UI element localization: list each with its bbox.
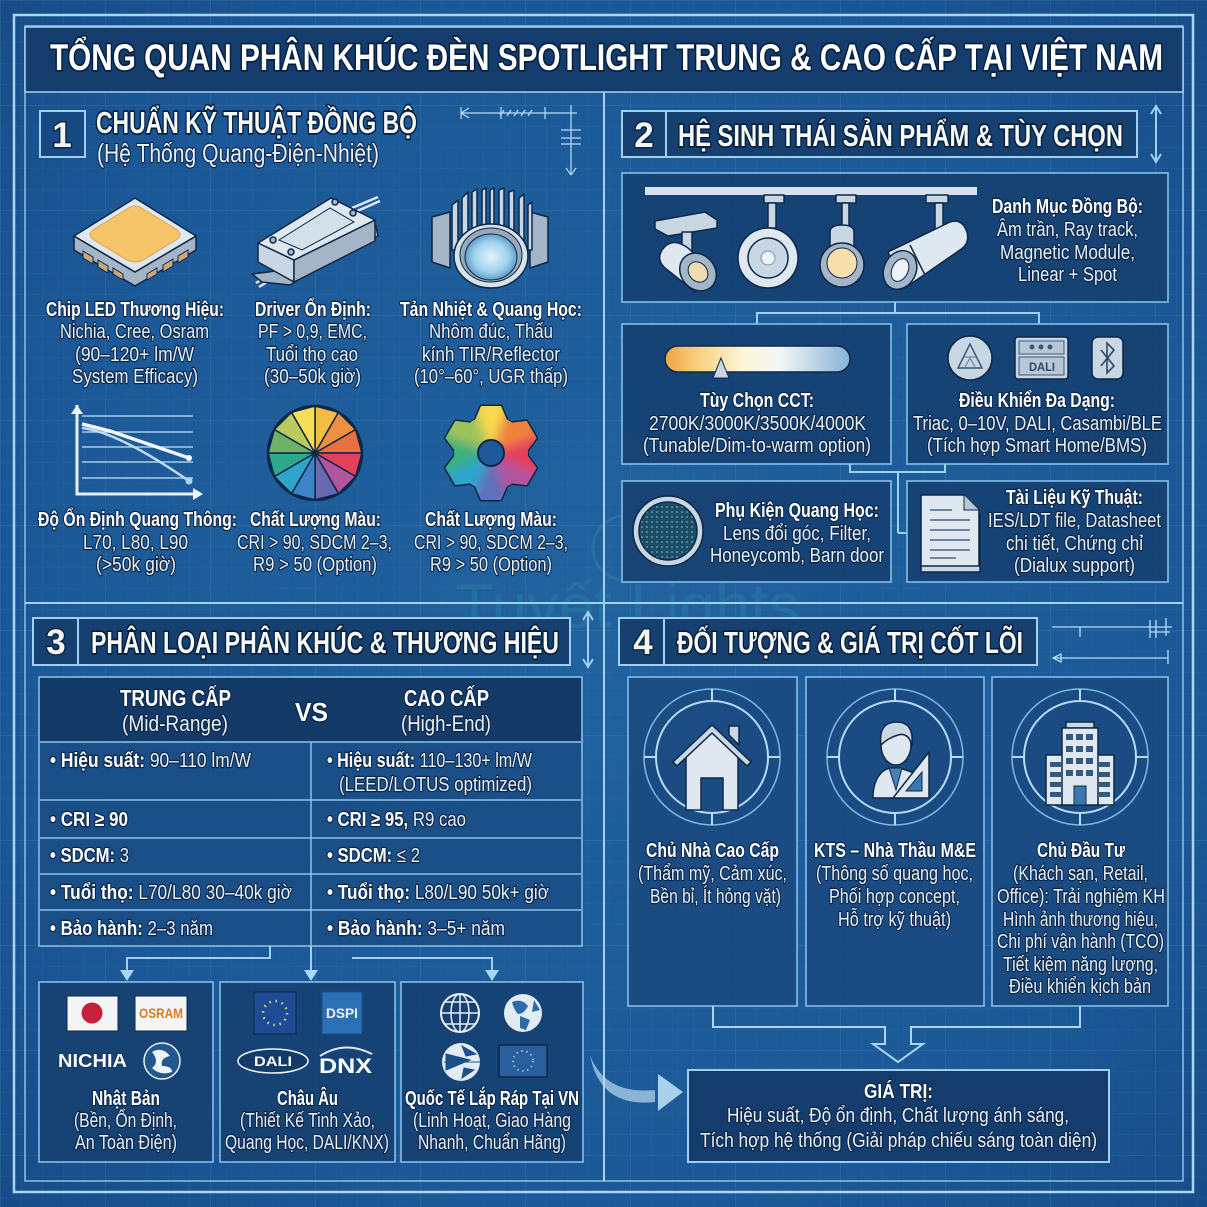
table header: (Mid-Range) xyxy=(122,711,228,736)
section 4 heading: 4 xyxy=(633,623,653,662)
caption: investors: (Khách sạn, Retail, xyxy=(1013,863,1148,885)
caption: CCT: 2700K/3000K/3500K/4000K xyxy=(649,413,867,435)
caption: homeowners: Chủ Nhà Cao Cấp xyxy=(646,840,779,862)
caption: LED chip: Nichia, Cree, Osram xyxy=(60,321,209,343)
icons: Europe logos: DNX xyxy=(319,1055,372,1078)
caption: Europe xyxy=(225,1086,389,1154)
mid-range column: • Tuổi thọ: L70/L80 30–40k giờ xyxy=(50,882,292,904)
mid-range column: • Bảo hành: 2–3 năm xyxy=(50,918,213,940)
section 2 heading: 2 xyxy=(634,116,654,155)
table header: (High-End) xyxy=(401,711,491,736)
connector: range branches xyxy=(757,302,1039,324)
caption: LED chip: Chip LED Thương Hiệu: xyxy=(46,299,224,321)
caption: accessories: Phụ Kiện Quang Học: xyxy=(715,500,879,522)
caption: Europe: (Thiết Kế Tinh Xảo, xyxy=(240,1110,375,1132)
caption: controls xyxy=(913,390,1162,457)
caption: product range: Âm trần, Ray track, xyxy=(997,218,1138,241)
section 1 heading xyxy=(40,104,417,168)
comparison table xyxy=(39,677,582,946)
caption: driver: Driver Ổn Định: xyxy=(255,297,371,321)
caption: accessories: Honeycomb, Barn door xyxy=(710,545,884,567)
caption: driver: (30–50k giờ) xyxy=(264,366,361,388)
panel: section 3 segments and brands xyxy=(33,612,593,1162)
icons: global logos xyxy=(441,994,547,1081)
table header: TRUNG CẤP xyxy=(120,684,231,711)
caption: heat and optics: kính TIR/Reflector xyxy=(422,344,560,366)
high-end column: (LEED/LOTUS optimized) xyxy=(339,774,532,796)
high-end column: • Bảo hành: 3–5+ năm xyxy=(327,918,505,940)
caption: documentation: chi tiết, Chứng chỉ xyxy=(1006,533,1143,555)
arrows: table to brand groups xyxy=(120,946,499,981)
panel: section 2 product ecosystem xyxy=(622,106,1168,582)
table header: CAO CẤP xyxy=(404,684,489,711)
caption: Japan: (Bền, Ổn Định, xyxy=(74,1108,177,1132)
caption: investors: Chi phí vận hành (TCO) xyxy=(997,931,1164,953)
caption: colour quality 1: Chất Lượng Màu: xyxy=(250,509,381,531)
high-end column xyxy=(327,750,549,940)
section 1 heading: CHUẨN KỸ THUẬT ĐỒNG BỘ xyxy=(96,104,417,140)
chart: lumen maintenance xyxy=(71,405,203,500)
caption: colour quality 1: R9 > 50 (Option) xyxy=(253,554,377,576)
panel: core value: GIÁ TRỊ: xyxy=(864,1080,933,1103)
caption: Europe: Châu Âu xyxy=(277,1086,338,1110)
caption: homeowners: Bền bỉ, Ít hỏng vặt) xyxy=(650,885,781,908)
caption: architects: Hỗ trợ kỹ thuật) xyxy=(838,908,951,931)
icon: architect xyxy=(827,689,963,825)
mid-range column: • SDCM: 3 xyxy=(50,845,129,867)
panel: section 4 audience and value xyxy=(590,618,1172,1162)
caption: investors: Office): Trải nghiệm KH xyxy=(997,886,1165,908)
caption: colour quality 2: CRI > 90, SDCM 2–3, xyxy=(414,532,568,554)
high-end column: • Hiệu suất: 110–130+ lm/W xyxy=(327,750,532,772)
icons: Europe logos: DSPI xyxy=(326,1005,358,1021)
caption: LED chip: System Efficacy) xyxy=(72,366,198,388)
caption: product range: Magnetic Module, xyxy=(1000,242,1135,264)
caption: heat and optics: (10°–60°, UGR thấp) xyxy=(414,366,568,388)
caption: investors: Chủ Đầu Tư xyxy=(1037,840,1125,862)
caption: accessories xyxy=(710,500,884,567)
panel: documentation xyxy=(907,481,1168,582)
mid-range column: • Hiệu suất: 90–110 lm/W xyxy=(50,750,251,772)
caption: colour quality 1 xyxy=(237,509,392,576)
caption: colour quality 2: Chất Lượng Màu: xyxy=(425,509,557,531)
connector: options to accessories xyxy=(850,464,945,533)
panel: product range xyxy=(622,173,1168,302)
arrow: cards to value xyxy=(713,1006,1080,1062)
caption: colour quality 2 xyxy=(414,509,568,576)
high-end column: • Tuổi thọ: L80/L90 50k+ giờ xyxy=(327,882,549,904)
section 4 heading xyxy=(619,618,1037,665)
section 4 heading: ĐỐI TƯỢNG & GIÁ TRỊ CỐT LÕI xyxy=(677,624,1023,660)
caption: driver: PF > 0,9, EMC, xyxy=(258,321,367,343)
section 1 heading: 1 xyxy=(52,116,72,155)
card: homeowners xyxy=(628,677,797,1006)
icon: document xyxy=(921,495,980,572)
caption: controls: Điều Khiển Đa Dạng: xyxy=(959,390,1115,412)
caption: CCT: Tùy Chọn CCT: xyxy=(700,390,814,412)
panel: controls xyxy=(907,324,1168,464)
high-end column: • SDCM: ≤ 2 xyxy=(327,845,420,867)
caption: controls: (Tích hợp Smart Home/BMS) xyxy=(927,435,1147,457)
caption: LED chip: (90–120+ lm/W xyxy=(75,344,194,366)
caption: international: Nhanh, Chuẩn Hãng) xyxy=(418,1132,566,1154)
caption: investors: Hình ảnh thương hiệu, xyxy=(1003,909,1158,931)
caption: LED chip xyxy=(46,299,224,388)
caption: homeowners xyxy=(638,840,787,908)
mid-range column xyxy=(50,750,292,940)
panel: Europe brands xyxy=(220,982,395,1162)
table header: VS xyxy=(295,697,328,727)
caption: heat and optics: Nhôm đúc, Thấu xyxy=(429,321,553,343)
caption: Japan xyxy=(74,1088,177,1154)
icons: control protocols xyxy=(948,336,1123,380)
icon: colour gear xyxy=(444,404,538,502)
caption: documentation: Tài Liệu Kỹ Thuật: xyxy=(1006,487,1143,509)
caption: documentation xyxy=(988,487,1161,577)
icons: control protocols: DALI xyxy=(1029,360,1055,374)
icons: Japan logos: NICHIA xyxy=(58,1051,127,1071)
caption: controls: Triac, 0–10V, DALI, Casambi/BLE xyxy=(913,413,1162,435)
panel: core value xyxy=(688,1070,1109,1162)
caption: colour quality 2: R9 > 50 (Option) xyxy=(430,554,552,576)
icon: track lights xyxy=(645,187,977,298)
icon: LED chip xyxy=(74,198,196,286)
caption: investors xyxy=(997,840,1165,998)
caption: CCT: (Tunable/Dim-to-warm option) xyxy=(643,435,871,457)
watermark: Tuyết Lights xyxy=(455,572,800,641)
icon: office building xyxy=(1012,689,1148,825)
panel: Japan brands xyxy=(39,982,213,1162)
panel: section 1 technical standards xyxy=(38,104,582,576)
section 3 heading: 3 xyxy=(46,623,66,662)
caption: Japan: Nhật Bản xyxy=(92,1088,160,1110)
panel: core value: Hiệu suất, Độ ổn định, Chất lượng ánh sáng, xyxy=(727,1105,1069,1127)
panel: optical accessories xyxy=(622,481,891,582)
icons: Europe logos: DALI xyxy=(254,1053,292,1069)
section 1 heading: (Hệ Thống Quang-Điện-Nhiệt) xyxy=(97,138,379,168)
icons: Japan logos: OSRAM xyxy=(139,1005,183,1021)
icon: house xyxy=(644,689,780,825)
icons: Europe logos xyxy=(238,992,372,1078)
caption: international: (Linh Hoạt, Giao Hàng xyxy=(413,1110,571,1132)
caption: lumen stability xyxy=(38,507,237,576)
caption: heat and optics xyxy=(400,299,582,388)
caption: lumen stability: (>50k giờ) xyxy=(96,554,176,576)
title bar xyxy=(25,27,1183,92)
icon: colour wheel xyxy=(268,406,362,500)
caption: international xyxy=(405,1086,579,1154)
table header xyxy=(120,684,491,736)
caption: documentation: IES/LDT file, Datasheet xyxy=(988,510,1161,532)
caption: CCT xyxy=(643,390,871,457)
caption: homeowners: (Thẩm mỹ, Cảm xúc, xyxy=(638,863,787,885)
blueprint dimension marks xyxy=(461,105,581,175)
caption: Europe: Quang Học, DALI/KNX) xyxy=(225,1132,389,1154)
icon: honeycomb lens xyxy=(633,496,703,566)
watermark xyxy=(455,516,800,641)
panel: core value: Tích hợp hệ thống (Giải pháp chiếu sáng toàn diện) xyxy=(700,1130,1097,1152)
caption: product range: Danh Mục Đồng Bộ: xyxy=(992,196,1143,218)
panel: international assembled in Vietnam xyxy=(401,982,583,1162)
arrow: vertical dimension xyxy=(1151,106,1161,162)
icons: Japan logos xyxy=(58,996,187,1079)
caption: product range: Linear + Spot xyxy=(1018,264,1117,286)
caption: lumen stability: Độ Ổn Định Quang Thông: xyxy=(38,507,237,531)
caption: architects: (Thông số quang học, xyxy=(816,863,973,885)
icon: heat sink and lens xyxy=(432,188,548,288)
card: investors xyxy=(992,677,1168,1006)
caption: product range xyxy=(992,196,1143,286)
panel: CCT options xyxy=(622,324,891,464)
caption: driver xyxy=(255,297,371,388)
arrow: brands to value xyxy=(590,1055,683,1111)
section 3 heading xyxy=(33,618,570,665)
icon: CCT gradient bar xyxy=(665,346,850,378)
caption: documentation: (Dialux support) xyxy=(1014,555,1135,577)
section 3 heading: PHÂN LOẠI PHÂN KHÚC & THƯƠNG HIỆU xyxy=(91,624,559,660)
caption: architects: KTS – Nhà Thầu M&E xyxy=(814,840,976,862)
card: architects and contractors xyxy=(806,677,984,1006)
icon: LED driver xyxy=(252,197,380,287)
caption: colour quality 1: CRI > 90, SDCM 2–3, xyxy=(237,532,392,554)
caption: architects: Phối hợp concept, xyxy=(829,886,960,908)
caption: heat and optics: Tản Nhiệt & Quang Học: xyxy=(400,299,582,321)
section 2 heading xyxy=(622,111,1137,157)
caption: lumen stability: L70, L80, L90 xyxy=(83,532,188,554)
caption: architects xyxy=(814,840,976,931)
caption: investors: Điều khiển kịch bản xyxy=(1009,976,1151,998)
caption: investors: Tiết kiệm năng lượng, xyxy=(1003,954,1158,976)
caption: accessories: Lens đổi góc, Filter, xyxy=(723,523,871,545)
caption: Japan: An Toàn Điện) xyxy=(75,1132,177,1154)
blueprint dimension marks xyxy=(1052,618,1172,664)
caption: international: Quốc Tế Lắp Ráp Tại VN xyxy=(405,1086,579,1110)
arrow: vertical dimension xyxy=(583,612,593,667)
caption: driver: Tuổi thọ cao xyxy=(266,344,358,366)
mid-range column: • CRI ≥ 90 xyxy=(50,809,128,831)
high-end column: • CRI ≥ 95, R9 cao xyxy=(327,809,466,831)
